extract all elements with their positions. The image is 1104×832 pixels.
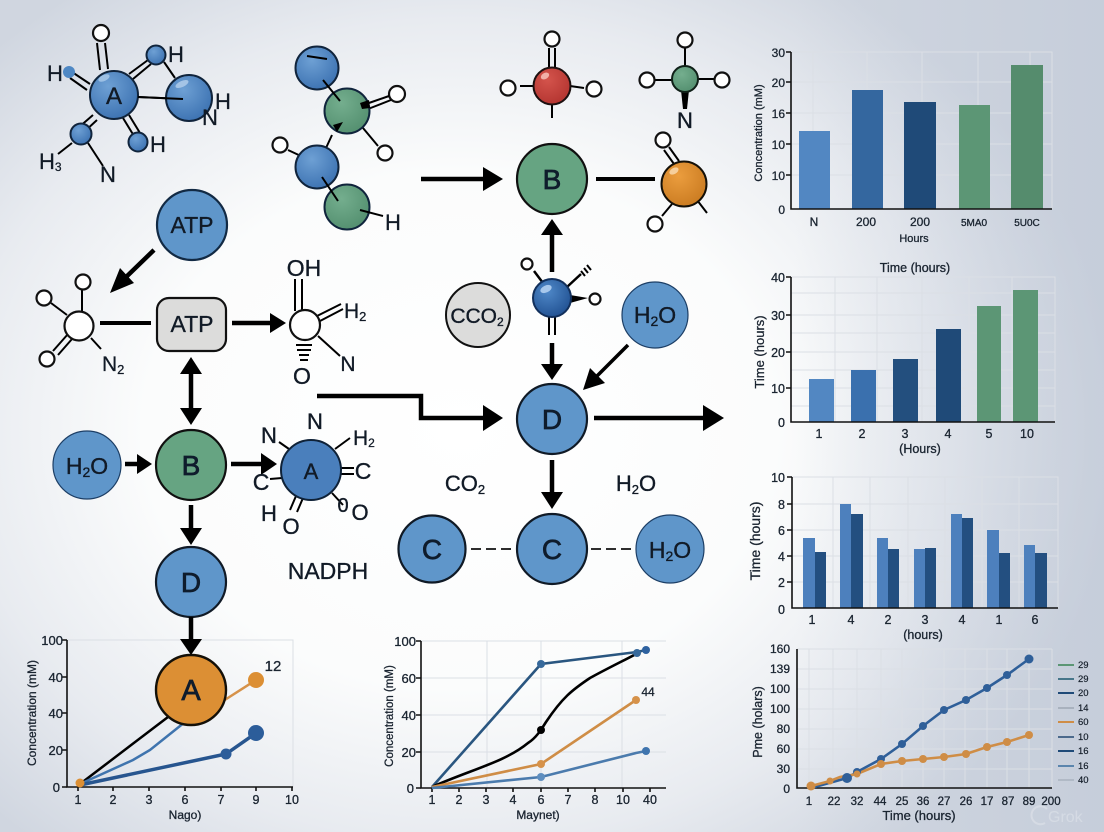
line chart: time series: 30 bbox=[777, 762, 790, 776]
arrow: H2O to B bbox=[125, 454, 152, 474]
molecule: right of ATP box bbox=[287, 255, 366, 389]
bar chart: time: 3 bbox=[902, 427, 909, 441]
line chart: bottom left: Concentration (mM) bbox=[25, 660, 39, 766]
bar chart: paired bars: 6 bbox=[1032, 613, 1039, 627]
node: H2O bottom: O bbox=[673, 537, 691, 563]
molecule: left of ATP box bbox=[36, 274, 124, 377]
node: C center bbox=[517, 514, 587, 584]
molecule: right of ATP box: OH bbox=[287, 255, 321, 281]
bar chart: time: 30 bbox=[771, 309, 785, 323]
node: C center: C bbox=[542, 534, 562, 565]
node: C left bbox=[398, 516, 466, 582]
line chart: bottom left: 7 bbox=[218, 793, 225, 807]
molecule: A cluster top left: H bbox=[215, 89, 231, 114]
molecule: A cluster top left: H bbox=[168, 42, 184, 67]
arrow: blue atom to D bbox=[541, 343, 563, 380]
molecule: A cluster top left: H bbox=[47, 61, 63, 86]
molecule: A cluster center left: N bbox=[307, 409, 323, 434]
arrow: into B bbox=[421, 167, 503, 191]
line chart: bottom center: 7 bbox=[565, 793, 572, 807]
node: D center: D bbox=[542, 404, 562, 435]
bar chart: time: 5 bbox=[986, 427, 993, 441]
molecule: right of ATP box: N bbox=[340, 353, 356, 376]
line chart: bottom left: 2 bbox=[110, 793, 117, 807]
molecule: A cluster center left: C bbox=[253, 469, 269, 495]
arrow: B to A bbox=[231, 453, 277, 475]
bar chart: concentration: 200 bbox=[856, 215, 876, 229]
node: H2O bottom: H bbox=[649, 537, 665, 563]
chart legend: 29 bbox=[1078, 660, 1089, 671]
line chart: bottom left: 20 bbox=[49, 743, 63, 758]
molecule: red atom bbox=[500, 32, 602, 118]
line chart: bottom left: 100 bbox=[41, 633, 63, 648]
line chart: time series bbox=[751, 642, 1061, 823]
molecule: A cluster center left: A bbox=[304, 459, 319, 484]
line chart: bottom left: 9 bbox=[253, 793, 260, 807]
arrow: ATP to left molecule bbox=[110, 250, 154, 293]
bar chart: time: 20 bbox=[771, 346, 785, 360]
node: H2O right bbox=[622, 282, 688, 348]
line chart: bottom center: 1 bbox=[429, 793, 436, 807]
line chart: bottom center: 0 bbox=[407, 781, 414, 796]
bar chart: paired bars: 4 bbox=[959, 613, 966, 627]
line chart: time series: 0 bbox=[783, 782, 790, 796]
bar chart: concentration: 20 bbox=[772, 76, 785, 90]
bar chart: time: Time (hours) bbox=[880, 261, 950, 275]
molecule: A cluster top left: H bbox=[150, 132, 166, 157]
bar chart: paired bars: Time (hours) bbox=[747, 502, 763, 580]
line chart: time series: 25 bbox=[896, 796, 908, 808]
chart legend: 60 bbox=[1078, 717, 1089, 728]
molecule: green atom with N: N bbox=[677, 108, 693, 133]
node: CCO2: CCO bbox=[450, 305, 497, 328]
molecule: A cluster top left: A bbox=[106, 83, 122, 110]
line chart: time series: 26 bbox=[960, 796, 972, 808]
line chart: time series: 22 bbox=[828, 796, 840, 808]
line chart: bottom center: Concentration (mM) bbox=[384, 665, 396, 767]
chart legend: 29 bbox=[1078, 674, 1089, 685]
label: H2O bbox=[616, 471, 656, 497]
chart legend: 20 bbox=[1078, 688, 1089, 699]
molecule: A cluster center left: O bbox=[282, 514, 300, 539]
bar chart: time bbox=[752, 261, 1055, 456]
label: CO2: CO bbox=[445, 471, 478, 496]
line chart: time series: 80 bbox=[777, 722, 790, 736]
molecule: A cluster center left: H bbox=[353, 427, 368, 450]
bar chart: concentration: 0 bbox=[778, 203, 785, 217]
label: H2O: H bbox=[616, 471, 632, 496]
watermark: Grok bbox=[1048, 809, 1084, 826]
node: H2O right: H bbox=[634, 302, 650, 328]
line chart: time series: 89 bbox=[1023, 796, 1035, 808]
line chart: time series: 87 bbox=[1002, 796, 1014, 808]
arrow: B to D bbox=[180, 505, 202, 545]
connector: left molecule to ATP box bbox=[100, 321, 151, 325]
molecule: orange atom bbox=[648, 132, 707, 232]
bar chart: concentration: 5U0C bbox=[1014, 218, 1040, 229]
molecule: A cluster center left: H bbox=[261, 501, 277, 526]
node: A orange: A bbox=[181, 675, 201, 707]
molecule: A cluster center left: 2 bbox=[368, 436, 375, 450]
line chart: bottom center: 40 bbox=[643, 793, 657, 807]
bar chart: paired bars bbox=[747, 471, 1058, 642]
line chart: bottom left: 1 bbox=[75, 793, 82, 807]
node: B center: B bbox=[543, 164, 561, 195]
line chart: time series: 1 bbox=[806, 796, 812, 808]
line chart: time series: 100 bbox=[770, 682, 790, 696]
node: B left: B bbox=[182, 450, 200, 481]
bar chart: paired bars: 2 bbox=[778, 576, 785, 590]
molecule: A cluster top left: 3 bbox=[55, 160, 62, 174]
bars bbox=[799, 65, 1043, 209]
line chart: bottom center: 4 bbox=[510, 793, 517, 807]
line chart: time series: 60 bbox=[777, 742, 790, 756]
bar chart: paired bars: 10 bbox=[771, 471, 785, 485]
bar chart: concentration: 10 bbox=[772, 138, 785, 152]
line chart: bottom center: 40 bbox=[402, 708, 416, 723]
bar chart: concentration: 10 bbox=[772, 169, 785, 183]
line chart: bottom center: 3 bbox=[483, 793, 490, 807]
bars bbox=[809, 290, 1038, 422]
line chart: bottom center bbox=[384, 634, 666, 822]
line chart: time series: 32 bbox=[851, 796, 863, 808]
bar chart: concentration bbox=[753, 46, 1052, 245]
line chart: bottom center: 44 bbox=[641, 685, 655, 699]
molecule: chain top center bbox=[272, 46, 405, 235]
connector: dashed C to C bbox=[471, 548, 512, 550]
bar chart: paired bars: 3 bbox=[922, 613, 929, 627]
bar chart: time: (Hours) bbox=[899, 442, 941, 456]
line chart: time series: 27 bbox=[938, 796, 950, 808]
connector: B to orange atom bbox=[596, 177, 655, 181]
bar chart: concentration: 200 bbox=[910, 215, 930, 229]
arrow: D to C bbox=[541, 460, 563, 509]
line chart: bottom center: 8 bbox=[592, 793, 599, 807]
label: NADPH: NADPH bbox=[288, 558, 368, 584]
chart legend bbox=[1058, 660, 1089, 786]
line chart: bottom left bbox=[25, 633, 299, 822]
node: ATP top: ATP bbox=[170, 212, 214, 238]
bar chart: paired bars: 6 bbox=[778, 524, 785, 538]
arrow: blue atom up to B bbox=[541, 219, 563, 272]
line chart: bottom left: 6 bbox=[182, 793, 189, 807]
node: D left: D bbox=[181, 567, 201, 598]
bar chart: time: 4 bbox=[945, 427, 952, 441]
line chart: time series: Time (hours) bbox=[882, 808, 956, 823]
line chart: time series: 200 bbox=[1041, 796, 1061, 808]
node: ATP box bbox=[157, 298, 226, 351]
bar chart: time: Time (hours) bbox=[752, 315, 767, 389]
line chart: bottom center: 2 bbox=[456, 793, 463, 807]
bar chart: time: 1 bbox=[816, 427, 823, 441]
molecule: right of ATP box: 2 bbox=[359, 309, 366, 324]
arrow: ATP box to B double headed bbox=[180, 357, 202, 425]
bar chart: time: 10 bbox=[1020, 427, 1034, 441]
line chart: time series: 160 bbox=[770, 642, 790, 656]
molecule: A cluster center left: 0 bbox=[337, 495, 349, 517]
node: A orange bbox=[156, 655, 226, 725]
connector: dashed C to H2O bbox=[591, 548, 632, 550]
line chart: time series: 139 bbox=[770, 662, 790, 676]
arrow: D to right bbox=[594, 405, 724, 431]
molecule: right of ATP box: O bbox=[293, 363, 311, 389]
node: D center bbox=[517, 384, 587, 454]
bar chart: paired bars: 2 bbox=[885, 613, 892, 627]
line chart: time series: 36 bbox=[917, 796, 929, 808]
molecule: left of ATP box: 2 bbox=[117, 362, 124, 377]
molecule: A cluster center left: O bbox=[351, 500, 369, 525]
line chart: bottom left: Nago) bbox=[169, 808, 201, 822]
molecule: A cluster center left: C bbox=[355, 458, 371, 484]
bars bbox=[803, 504, 1047, 608]
bar chart: paired bars: 1 bbox=[809, 613, 816, 627]
line chart: bottom left: 40 bbox=[49, 670, 63, 685]
molecule: chain top center: H bbox=[385, 210, 401, 235]
molecule: A cluster top left: N bbox=[100, 162, 116, 187]
node: CCO2 bbox=[446, 283, 510, 347]
line chart: bottom left: 3 bbox=[146, 793, 153, 807]
arrow: D to A bbox=[180, 617, 202, 655]
node: D left bbox=[156, 547, 226, 617]
bar chart: concentration: Hours bbox=[899, 233, 929, 245]
label: H2O: O bbox=[639, 471, 656, 496]
arrow: elbow into D bbox=[317, 396, 503, 431]
bar chart: time: 2 bbox=[859, 427, 866, 441]
bar chart: paired bars: (hours) bbox=[903, 628, 943, 642]
node: H2O bottom bbox=[636, 515, 704, 583]
molecule: A cluster top left bbox=[39, 25, 231, 187]
node: H2O right: O bbox=[658, 302, 676, 328]
node: ATP top bbox=[157, 190, 227, 260]
line chart: bottom center: 100 bbox=[394, 634, 416, 649]
node: H2O bottom: 2 bbox=[665, 548, 673, 564]
chart legend: 10 bbox=[1078, 732, 1089, 743]
bar chart: concentration: 16 bbox=[772, 107, 785, 121]
line chart: bottom center: 6 bbox=[538, 793, 545, 807]
bar chart: concentration: Concentration (mM) bbox=[753, 84, 765, 182]
molecule: A cluster center left bbox=[253, 409, 375, 539]
bar chart: paired bars: 4 bbox=[778, 550, 785, 564]
line chart: time series: 44 bbox=[874, 796, 887, 808]
node: H2O left: O bbox=[90, 453, 108, 479]
arrow: H2O to D bbox=[583, 345, 628, 390]
node: B left bbox=[156, 430, 226, 500]
bar chart: time: 0 bbox=[778, 416, 785, 430]
bar chart: concentration: 30 bbox=[772, 46, 785, 60]
bar chart: paired bars: 0 bbox=[778, 603, 785, 617]
line chart: bottom center: 10 bbox=[616, 793, 630, 807]
line chart: bottom left: 0 bbox=[53, 780, 60, 795]
bar chart: time: 40 bbox=[771, 271, 785, 285]
watermark bbox=[1031, 806, 1084, 826]
line chart: bottom center: 20 bbox=[402, 745, 416, 760]
node: H2O left: 2 bbox=[82, 464, 90, 480]
line chart: time series: 100 bbox=[770, 702, 790, 716]
molecule: right of ATP box: H bbox=[344, 300, 359, 323]
bar chart: concentration: 5MA0 bbox=[961, 218, 987, 229]
node: H2O right: 2 bbox=[650, 313, 658, 329]
node: H2O left bbox=[53, 431, 121, 499]
line chart: bottom left: 40 bbox=[49, 706, 63, 721]
line chart: bottom center: 60 bbox=[402, 671, 416, 686]
line chart: bottom center: Maynet) bbox=[516, 808, 560, 822]
molecule: green atom with N bbox=[640, 32, 730, 133]
node: C left: C bbox=[422, 534, 442, 565]
chart legend: 16 bbox=[1078, 761, 1089, 772]
line chart: time series: Pme (holars) bbox=[751, 686, 765, 758]
bar chart: time: 10 bbox=[771, 382, 785, 396]
chart legend: 40 bbox=[1078, 775, 1089, 786]
bar chart: paired bars: 1 bbox=[996, 613, 1003, 627]
chart legend: 16 bbox=[1078, 746, 1089, 757]
bar chart: paired bars: 8 bbox=[778, 498, 785, 512]
node: B center bbox=[517, 144, 587, 214]
bar chart: concentration: N bbox=[810, 215, 818, 229]
line chart: time series: 17 bbox=[981, 796, 993, 808]
label: H2O: 2 bbox=[632, 482, 639, 497]
line chart: bottom left: 10 bbox=[285, 793, 299, 807]
line chart: bottom left: 12 bbox=[265, 658, 281, 675]
bar chart: paired bars: 4 bbox=[848, 613, 855, 627]
molecule: A cluster center left: N bbox=[261, 423, 277, 448]
arrow: ATP box to right molecule bbox=[232, 313, 286, 333]
molecule: blue atom center bbox=[522, 258, 600, 335]
molecule: A cluster top left: H bbox=[39, 149, 55, 174]
node: CCO2: 2 bbox=[497, 315, 504, 329]
molecule: A cluster top left: N bbox=[202, 105, 218, 130]
label: CO2: 2 bbox=[478, 482, 485, 497]
node: ATP box: ATP bbox=[170, 311, 214, 337]
chart legend: 14 bbox=[1078, 703, 1089, 714]
molecule: left of ATP box: N bbox=[102, 353, 117, 376]
node: H2O left: H bbox=[66, 453, 82, 479]
